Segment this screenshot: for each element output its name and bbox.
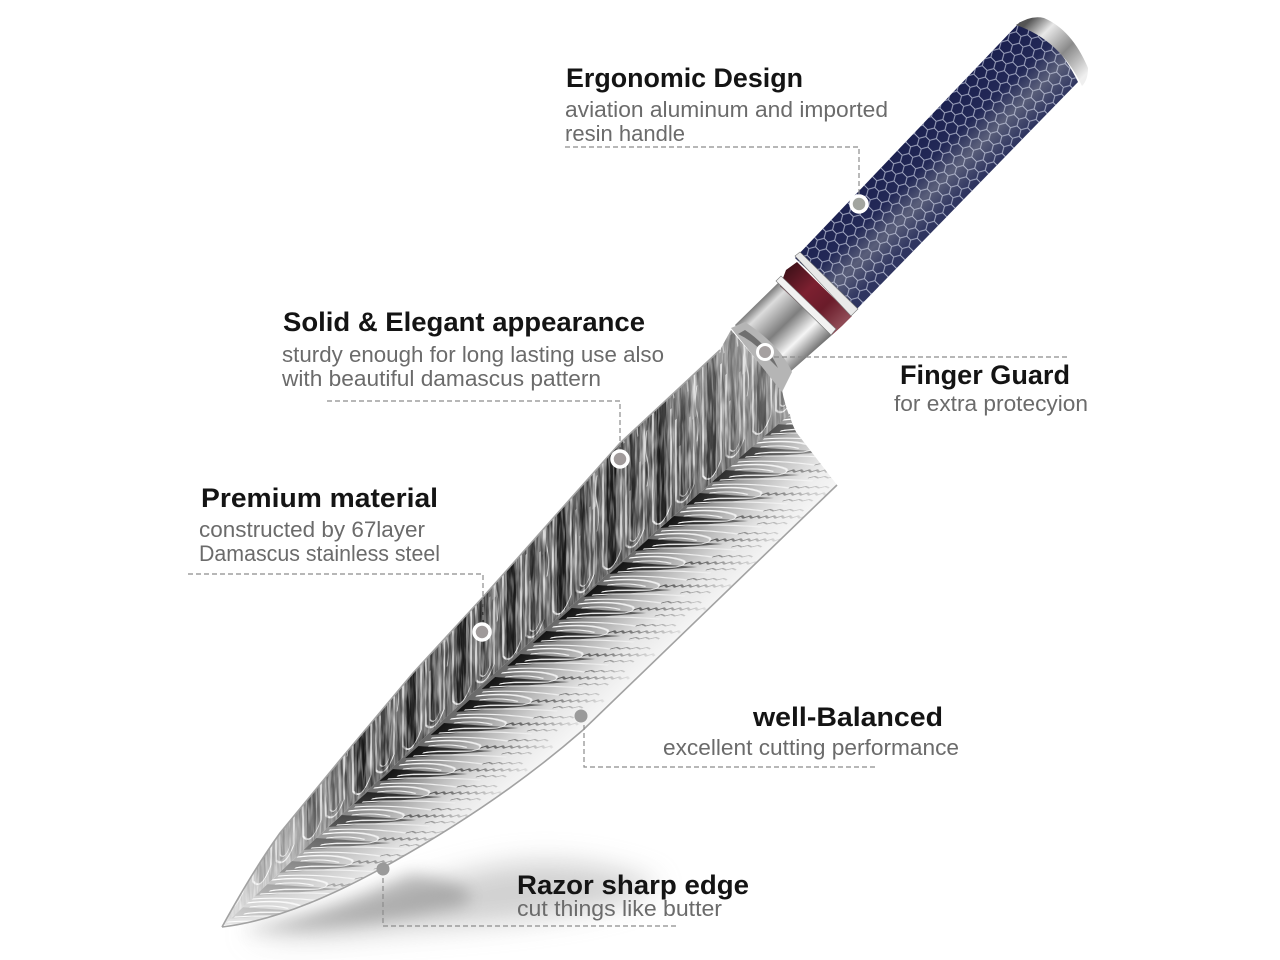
callout: Solid & Elegant appearance: with beautiful damascus pattern [281,366,601,391]
callout: well-Balanced: well-Balanced [752,702,943,732]
blade upper damascus streaks [224,330,789,925]
blade lower chevron pattern [224,414,836,925]
callout: Ergonomic Design: Ergonomic Design [566,63,803,93]
silver ring upper [795,252,858,316]
knife shadow [240,862,660,938]
steel ferrule [735,283,832,385]
callout: Solid & Elegant appearance [281,307,664,467]
callout: Premium material: constructed by 67layer [199,517,425,542]
callout: Ergonomic Design [565,63,888,212]
infographic: knife with feature callouts [188,17,1088,948]
callout: Razor sharp edge: Razor sharp edge [517,870,749,900]
callout: Solid & Elegant appearance: Solid & Elegant appearance [283,307,645,337]
callout: Finger Guard: for extra protecyion [894,391,1088,416]
callout: Premium material: Damascus stainless steel [199,541,440,566]
callout: Ergonomic Design: aviation aluminum and imported [565,97,888,122]
callout: Razor sharp edge [376,862,749,926]
callout: well-Balanced: excellent cutting performance [663,735,959,760]
silver ring lower [776,276,836,335]
callout: well-Balanced [574,702,959,767]
handle end cap [1016,17,1088,86]
knife handle [731,10,1100,392]
callout: Premium material [188,483,490,640]
red resin ring [780,262,852,335]
knife blade [200,320,850,940]
finger guard bolster [731,322,792,392]
callout: Finger Guard: Finger Guard [900,360,1070,390]
callout: Razor sharp edge: cut things like butter [517,896,722,921]
callout: Premium material: Premium material [201,483,438,513]
callout: Solid & Elegant appearance: sturdy enough for long lasting use also [282,342,664,367]
callout: Ergonomic Design: resin handle [565,121,685,146]
blade tip and heel highlights [200,330,850,940]
handle honeycomb resin [795,22,1078,308]
blade outline [222,350,837,927]
callout: Finger Guard [758,344,1088,416]
